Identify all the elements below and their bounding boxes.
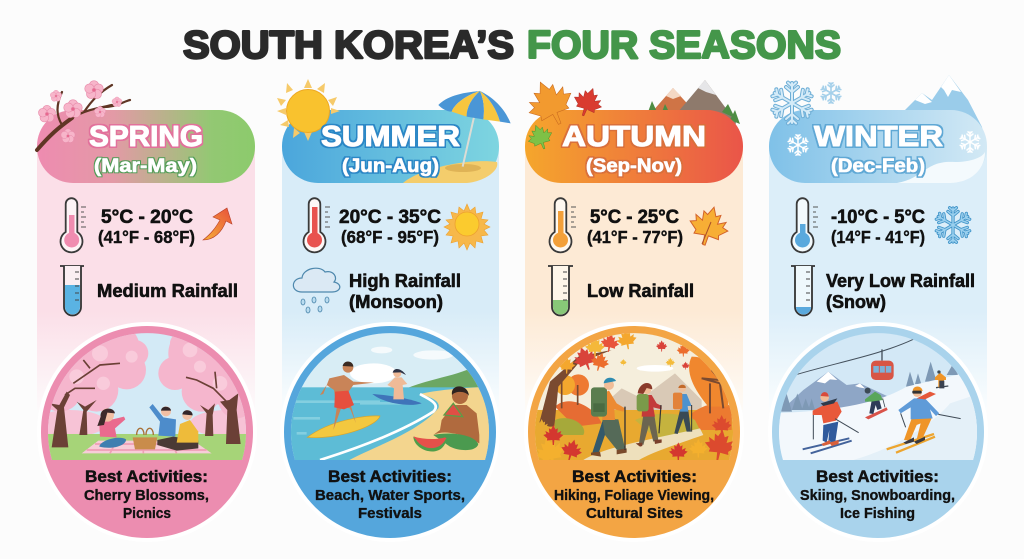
icon: thermometer [304, 198, 330, 252]
icon: thermometer [61, 198, 86, 252]
temperature text: 5°C - 25°C [590, 207, 679, 228]
autumn header: AUTUMN [562, 121, 706, 153]
icon: sun [277, 79, 340, 141]
title [183, 24, 841, 67]
autumn panel background [525, 146, 743, 410]
activities text: Festivals [358, 506, 422, 522]
activities text: Cultural Sites [586, 506, 683, 522]
temperature text: (41°F - 68°F) [98, 227, 195, 247]
activities text [554, 468, 714, 522]
activities text: Picnics [123, 506, 171, 522]
activity circle: winter [770, 324, 990, 540]
activities text [800, 468, 955, 522]
winter header: WINTER [814, 121, 943, 153]
spring header: SPRING [89, 121, 203, 153]
activities text: Beach, Water Sports, [315, 488, 465, 504]
rainfall text: Low Rainfall [587, 281, 694, 301]
icon: leaf [685, 202, 733, 250]
icon: rain gauge [548, 266, 573, 316]
title: SOUTH KOREA’S [183, 24, 514, 67]
icon: thermometer [550, 198, 576, 252]
winter panel background [769, 146, 987, 410]
panel: winter [769, 75, 990, 540]
icon: maple leaves [519, 72, 607, 153]
temperature text [587, 207, 683, 247]
temperature text: (41°F - 77°F) [587, 227, 683, 247]
spring panel background [37, 146, 255, 410]
rainfall text: High Rainfall [349, 271, 461, 291]
activity circle: autumn [526, 324, 745, 540]
icon: snowflake [935, 208, 971, 242]
icon: beach umbrella [438, 91, 511, 167]
rainfall text: Medium Rainfall [97, 281, 238, 301]
rainfall text: (Monsoon) [349, 292, 443, 312]
rainfall text: (Snow) [826, 292, 886, 312]
hiking scene [535, 333, 733, 460]
icon: cherry branch [37, 81, 130, 150]
temperature text [831, 207, 925, 247]
winter header: (Dec-Feb) [831, 156, 925, 177]
activities text [315, 468, 465, 522]
rainfall text [826, 271, 975, 312]
skiing scene [779, 333, 977, 460]
panel: spring [33, 81, 263, 540]
spring header: (Mar-May) [94, 156, 197, 177]
panel: summer [277, 79, 511, 540]
temperature text: 20°C - 35°C [339, 207, 441, 228]
activities text [84, 468, 209, 522]
spring header [37, 110, 255, 183]
temperature text: -10°C - 5°C [831, 207, 925, 228]
activities text: Skiing, Snowboarding, [800, 488, 955, 504]
icon: small sun [444, 204, 490, 250]
activities text: Hiking, Foliage Viewing, [554, 488, 714, 504]
temperature text: (68°F - 95°F) [341, 227, 439, 247]
activity circle: summer [280, 324, 503, 540]
autumn header: (Sep-Nov) [586, 156, 682, 177]
activities text: Best Activities: [85, 468, 208, 486]
temperature text [339, 207, 441, 247]
beach scene [291, 333, 489, 460]
winter header [769, 110, 987, 183]
summer header: SUMMER [321, 121, 460, 153]
summer header [277, 79, 499, 183]
icon: rising arrow [203, 208, 232, 240]
rainfall text [349, 271, 461, 312]
summer panel background [282, 146, 499, 410]
activities text: Best Activities: [328, 468, 452, 486]
summer header: (Jun-Aug) [342, 156, 439, 177]
title: FOUR SEASONS [527, 24, 841, 67]
picnic scene [48, 333, 246, 460]
temperature text: 5°C - 20°C [101, 207, 193, 228]
icon: thermometer [791, 198, 818, 252]
activity circle: spring [33, 320, 263, 540]
rainfall text: Very Low Rainfall [826, 271, 975, 291]
icon: rain gauge [791, 266, 815, 316]
icon: snowflakes [771, 83, 980, 155]
panel: autumn [519, 72, 745, 540]
activities text: Best Activities: [572, 468, 697, 486]
icon: rain gauge [60, 266, 84, 316]
activities text: Ice Fishing [840, 506, 915, 522]
activities text: Cherry Blossoms, [84, 488, 209, 504]
autumn header [525, 110, 743, 183]
temperature text: (14°F - 41°F) [831, 227, 925, 247]
icon: rain cloud [293, 268, 340, 313]
icon: mountains [648, 80, 740, 128]
temperature text [98, 207, 195, 247]
activities text: Best Activities: [816, 468, 939, 486]
icon: snowy mountains [905, 75, 985, 145]
